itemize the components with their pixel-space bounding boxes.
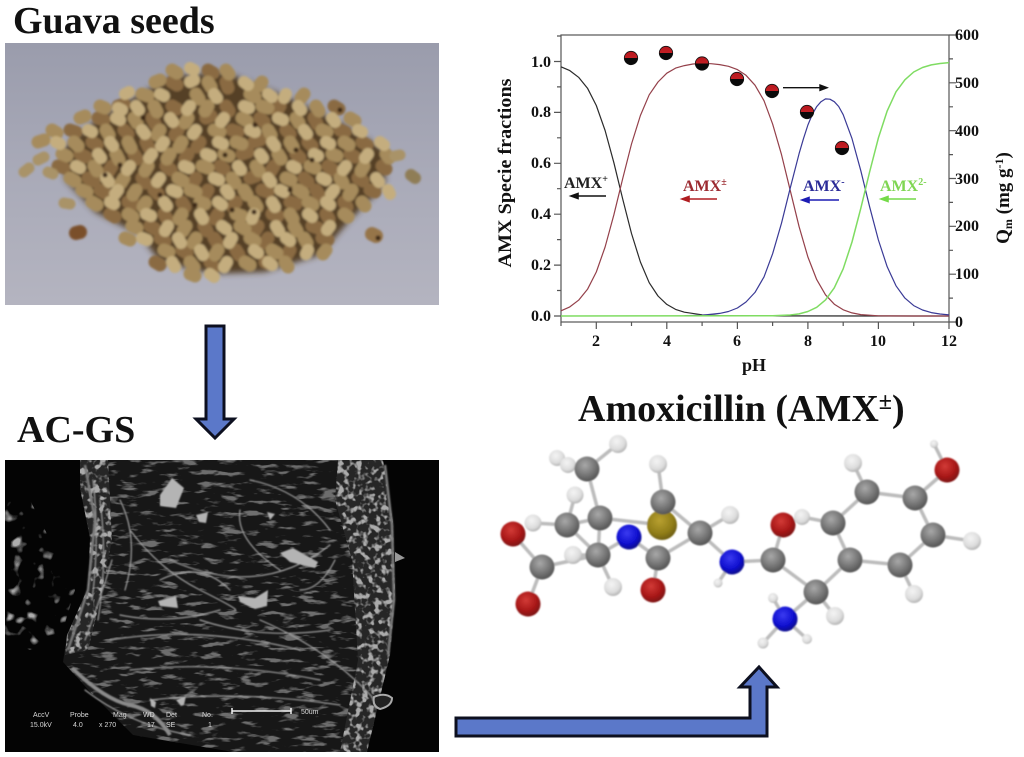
label: AMX2-: [880, 177, 927, 202]
panel: guava seeds photo: [5, 43, 439, 305]
label: AMX zwitterion: ±: [721, 177, 727, 188]
left axis title: AMX Specie fractions: [495, 79, 516, 267]
x axis labels: 4: [663, 333, 671, 350]
label: AMX zwitterion: [682, 177, 727, 202]
left axis labels: 0.0: [531, 308, 551, 325]
SEM data bar: [30, 709, 319, 729]
panel: SEM micrograph: [5, 460, 439, 752]
SEM data bar: x 270: [99, 722, 116, 729]
x axis labels: 8: [804, 333, 812, 350]
molecule: amoxicillin ball and stick: [500, 435, 981, 648]
Qm data points: [624, 46, 849, 155]
arrow: AC-GS to amoxicillin: [456, 667, 777, 736]
right axis labels: [955, 27, 979, 331]
heading: Amoxicillin: ): [892, 388, 905, 430]
right axis labels: 400: [955, 123, 979, 140]
SEM data bar: Det: [166, 712, 177, 719]
arrow: Qm series to right axis: [783, 85, 827, 90]
curve: AMX+: [561, 67, 949, 316]
right axis labels: 100: [955, 266, 979, 283]
scale bar: [232, 708, 291, 714]
label: AMX zwitterion: AMX: [683, 178, 721, 195]
label: AMX+: AMX: [564, 175, 602, 192]
heading: Amoxicillin: Amoxicillin (AMX: [578, 388, 879, 430]
label: AMX+: +: [602, 174, 608, 185]
arrow: seeds to AC-GS: [196, 326, 234, 438]
label: AMX-: -: [841, 177, 845, 188]
left axis labels: 0.4: [531, 206, 551, 223]
left axis labels: [531, 54, 551, 325]
curve: AMX zwitterion: [561, 64, 949, 316]
right axis title: -1: [992, 158, 1006, 168]
left axis labels: 0.8: [531, 104, 551, 121]
x axis labels: [592, 333, 957, 350]
label: AMX-: [802, 177, 845, 202]
SEM data bar: 1: [208, 722, 212, 729]
SEM data bar: No.: [202, 712, 213, 719]
right axis title: m: [1001, 219, 1015, 229]
right axis title: (mg g: [993, 168, 1014, 219]
SEM data bar: 17: [147, 722, 155, 729]
right axis labels: 0: [955, 314, 963, 331]
heading: Amoxicillin: ±: [879, 389, 892, 415]
right axis labels: 600: [955, 27, 979, 44]
stray seeds: [24, 155, 415, 236]
bottom left bright rim: [72, 668, 170, 735]
SEM data bar: 15.0kV: [30, 722, 52, 729]
SEM data bar: WD: [143, 712, 155, 719]
particle body: [60, 460, 405, 752]
x axis labels: 6: [733, 333, 741, 350]
SEM data bar: Probe: [70, 712, 89, 719]
SEM data bar: SE: [166, 722, 176, 729]
SEM data bar: 50um: [301, 709, 319, 716]
x axis labels: 10: [870, 333, 886, 350]
right axis title: Q: [993, 229, 1014, 244]
SEM data bar: AccV: [33, 712, 50, 719]
label: AMX+: [564, 174, 608, 198]
heading: Guava seeds: Guava seeds: [13, 0, 215, 42]
label: AMX2-: AMX: [880, 178, 918, 195]
right axis labels: 300: [955, 171, 979, 188]
left axis labels: 0.6: [531, 155, 551, 172]
left debris: [5, 500, 75, 650]
left axis labels: 0.2: [531, 257, 551, 274]
plot frame and ticks: [554, 35, 956, 329]
SEM data bar: 4.0: [73, 722, 83, 729]
curve: AMX2-: [561, 63, 949, 316]
label: AMX2-: 2-: [918, 177, 927, 188]
SEM data bar: Mag: [113, 712, 127, 719]
right axis title: ): [993, 152, 1014, 158]
heading: AC-GS: AC-GS: [17, 409, 135, 451]
x axis labels: 12: [941, 333, 957, 350]
chart: AMX specie fractions and Qm vs pH: [495, 27, 1015, 375]
left axis labels: 1.0: [531, 54, 551, 71]
seed pile: [24, 68, 415, 277]
curve: AMX-: [684, 99, 949, 316]
label: AMX-: AMX: [803, 178, 841, 195]
x axis title: pH: [742, 355, 766, 375]
x axis labels: 2: [592, 333, 600, 350]
right axis labels: 200: [955, 218, 979, 235]
right axis labels: 500: [955, 75, 979, 92]
